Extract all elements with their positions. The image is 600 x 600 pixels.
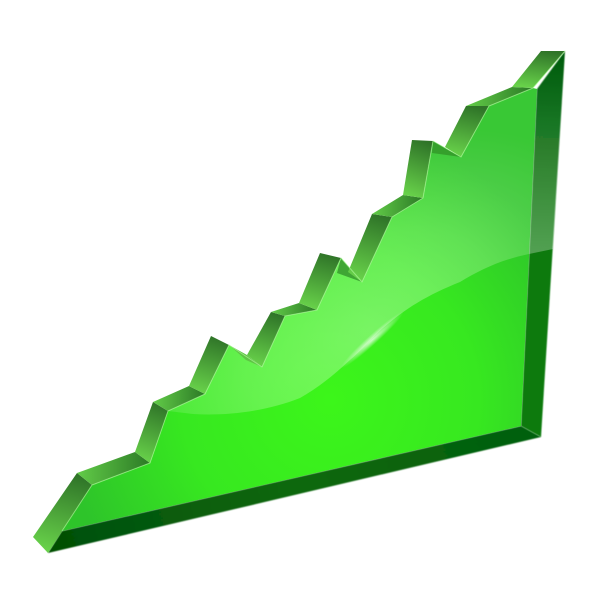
light edge along top of front face — [62, 51, 565, 531]
gloss highlight on front face — [168, 88, 537, 414]
gloss highlight on right side face — [529, 51, 565, 254]
front face — [62, 88, 537, 531]
left end wall — [33, 473, 92, 553]
step walls and tops — [77, 51, 565, 485]
light flare on gloss curve — [337, 308, 407, 372]
bottom side face — [48, 426, 541, 553]
right side face — [521, 51, 565, 437]
